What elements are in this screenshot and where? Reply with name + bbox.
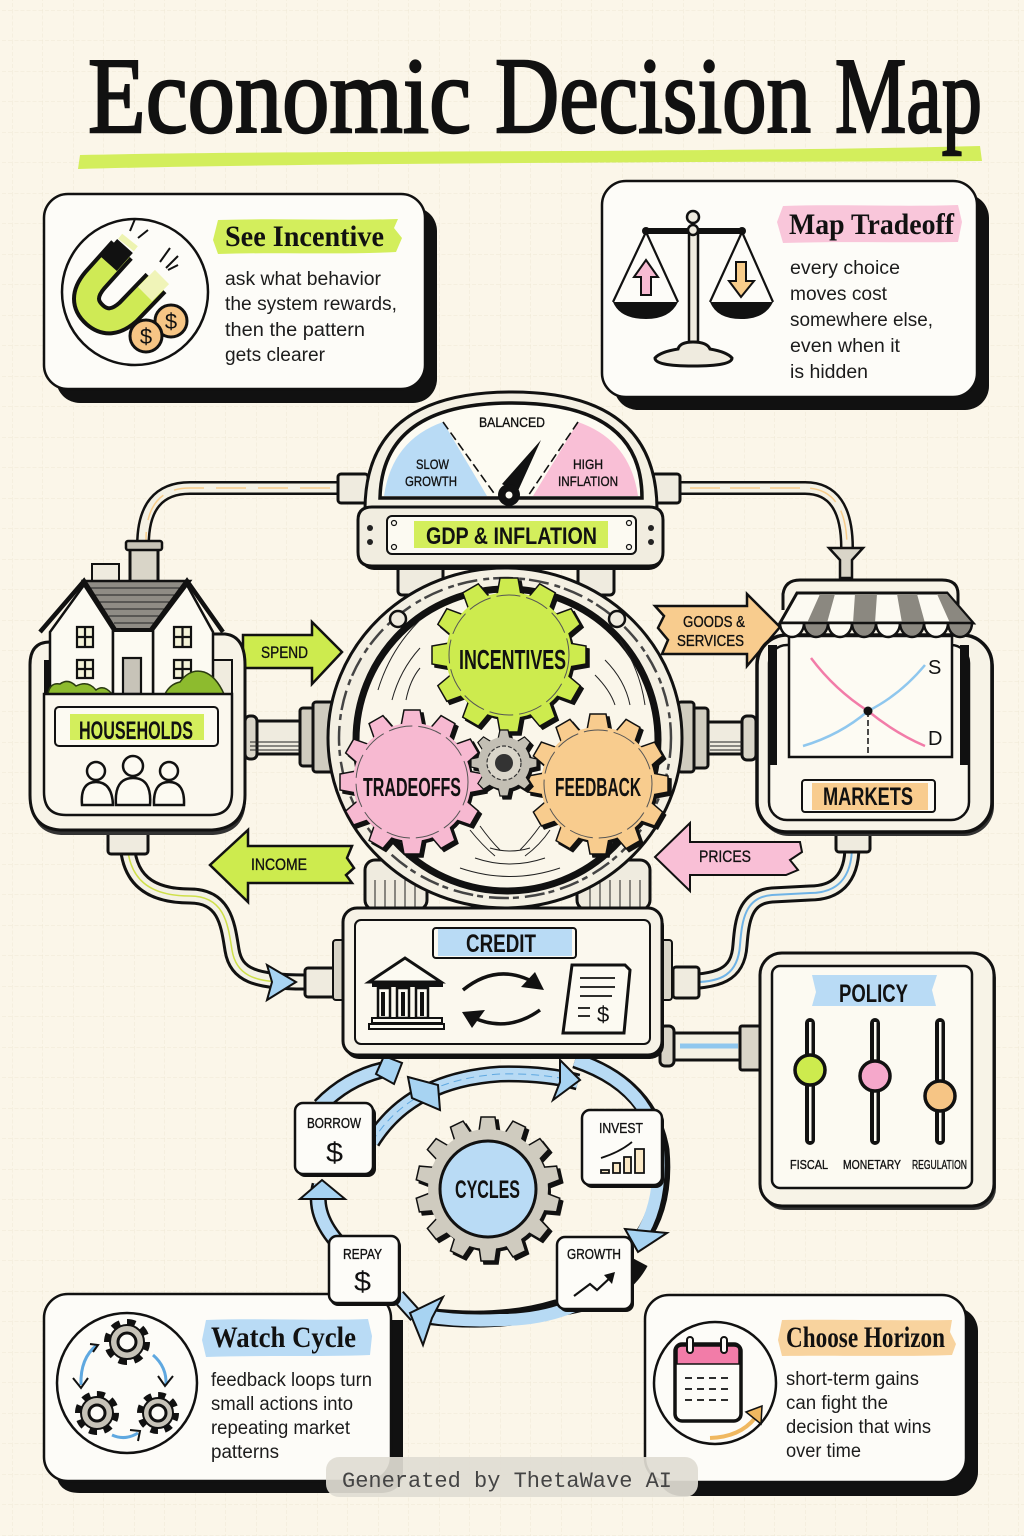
node: BORROW: BORROW [307,1116,361,1132]
gauge label: high inflation [558,456,618,489]
ring ribbon: borrow to invest [372,1060,580,1142]
panel: Households [30,541,246,835]
gear: CYCLES [416,1117,560,1261]
body text: can fight the [786,1393,888,1414]
ring ribbon: repay to borrow [300,1180,345,1245]
heading highlight [202,1319,372,1357]
body text: the system rewards, [225,294,397,315]
gauge label: slow growth: SLOW [416,456,450,472]
body text: over time [786,1441,861,1462]
pipe: markets to credit [673,832,870,998]
node: REPAY: $ [354,1266,371,1297]
policy label: POLICY [839,980,908,1008]
body text [786,1369,931,1462]
icon: balance scale [613,211,773,366]
slider: fiscal [790,1018,828,1172]
node: INVEST [582,1110,664,1188]
title: Decision [495,37,811,156]
body text: small actions into [211,1394,353,1415]
watermark [326,1457,698,1497]
icon: magnet attracting coins: $ [165,309,177,334]
body text: then the pattern [225,320,365,341]
body text [790,258,933,383]
awning frame [783,580,958,612]
arrow: GOODS & SERVICES [655,594,780,666]
icon: magnet attracting coins [62,219,208,365]
slider: regulation: REGULATION [912,1157,967,1172]
gear: FEEDBACK [528,714,668,854]
gear housing [328,568,682,908]
body text: somewhere else, [790,310,933,331]
gauge label: high inflation: INFLATION [558,473,618,489]
households label: HOUSEHOLDS [79,717,193,745]
panel: Markets [757,580,994,836]
panel: Watch Cycle [44,1294,403,1493]
credit label [433,928,576,958]
slider: regulation [912,1018,967,1172]
body text: repeating market [211,1418,351,1439]
households inner plate [44,694,232,815]
ring ribbon: invest to growth [575,1060,667,1252]
heading highlight [777,205,962,243]
icon: striped awning [780,593,973,637]
body text: is hidden [790,362,868,383]
gauge label: slow growth [405,456,457,489]
gear: small center [471,730,537,796]
panel: Policy [760,953,996,1210]
icon: loan document: $ [597,1002,609,1027]
gauge label: slow growth: GROWTH [405,473,457,489]
arrow: SPEND [243,622,342,684]
heading: Watch Cycle: Watch Cycle [211,1321,356,1354]
ring ribbon: borrow to credit [320,1056,402,1106]
gear: FEEDBACK: FEEDBACK [555,772,641,802]
gauge dial [380,403,642,506]
panel: Credit [333,908,672,1059]
icon: circular arrows [462,972,544,1028]
panel: See Incentive [44,194,437,403]
arrow: PRICES: PRICES [699,847,751,866]
arrow: GOODS & SERVICES: SERVICES [677,633,744,650]
cycle ring arrows [300,1056,667,1345]
slider: monetary [843,1018,901,1172]
body text: moves cost [790,284,888,305]
arrow: GOODS & SERVICES: GOODS & [683,614,745,631]
gear: TRADEOFFS: TRADEOFFS [363,772,461,802]
supply and demand chart: S [928,657,941,679]
credit label: CREDIT [466,930,536,958]
body text: ask what behavior [225,269,382,290]
icon: bank [369,958,444,1029]
markets label: MARKETS [823,783,913,811]
panel: Map Tradeoff [602,181,989,410]
ring ribbon: growth to repay [398,1262,640,1345]
body text [225,269,397,366]
gauge base plate [358,507,663,570]
icon: feedback gears [57,1313,197,1453]
node: GROWTH: GROWTH [567,1247,621,1263]
title [88,37,982,156]
icon: calendar with arrow [654,1322,776,1444]
icon: house [40,541,224,696]
body text: gets clearer [225,345,326,366]
body text: every choice [790,258,900,279]
gear: INCENTIVES [432,578,586,732]
title underline highlight [78,146,982,169]
watermark: Generated by ThetaWave AI [342,1469,672,1494]
slider: fiscal: FISCAL [790,1157,828,1172]
connector: households to gears [245,702,335,772]
heading highlight [213,219,402,254]
body text: feedback loops turn [211,1370,372,1391]
body text: patterns [211,1442,279,1463]
icon: people [82,756,184,805]
pipe: gauge to households [143,474,368,545]
node: INVEST: INVEST [599,1121,643,1137]
connector: gears to markets [678,702,756,772]
households label [55,707,218,746]
panel: Choose Horizon [645,1295,978,1496]
supply and demand chart [789,636,952,757]
heading: Choose Horizon: Choose Horizon [786,1321,945,1354]
heading highlight [778,1320,956,1356]
gauge title: GDP & INFLATION [426,523,597,550]
body text: even when it [790,336,901,357]
body text: decision that wins [786,1417,931,1438]
gear: TRADEOFFS [340,710,484,854]
body text: short-term gains [786,1369,919,1390]
slider: monetary: MONETARY [843,1157,901,1172]
gauge label: high inflation: HIGH [573,456,603,472]
supply and demand chart: D [928,728,942,750]
policy label [812,975,937,1008]
gear: INCENTIVES: INCENTIVES [459,644,566,675]
heading: Map Tradeoff: Map Tradeoff [789,208,955,241]
gauge label: balanced: BALANCED [479,414,545,430]
icon: magnet attracting coins: $ [140,324,152,349]
arrow: PRICES [655,823,802,891]
body text [211,1370,372,1463]
pipe: gauge to markets [652,474,863,578]
title: Economic [88,37,471,156]
node: GROWTH [557,1237,634,1312]
pipe: households to credit [108,830,337,1000]
node: BORROW [295,1103,376,1177]
node: REPAY [329,1236,401,1306]
node: BORROW: $ [326,1137,343,1168]
gear: CYCLES: CYCLES [455,1176,520,1204]
connectors: housing to credit [365,860,650,910]
arrow: INCOME [210,830,354,902]
connector: policy to credit [660,1026,762,1070]
arrow: INCOME: INCOME [251,855,307,874]
icon: loan document [563,965,630,1033]
node: REPAY: REPAY [343,1247,382,1263]
heading: See Incentive: See Incentive [225,220,384,253]
gauge: GDP and inflation [358,392,663,595]
arrow: SPEND: SPEND [261,643,308,662]
markets label [802,780,935,812]
